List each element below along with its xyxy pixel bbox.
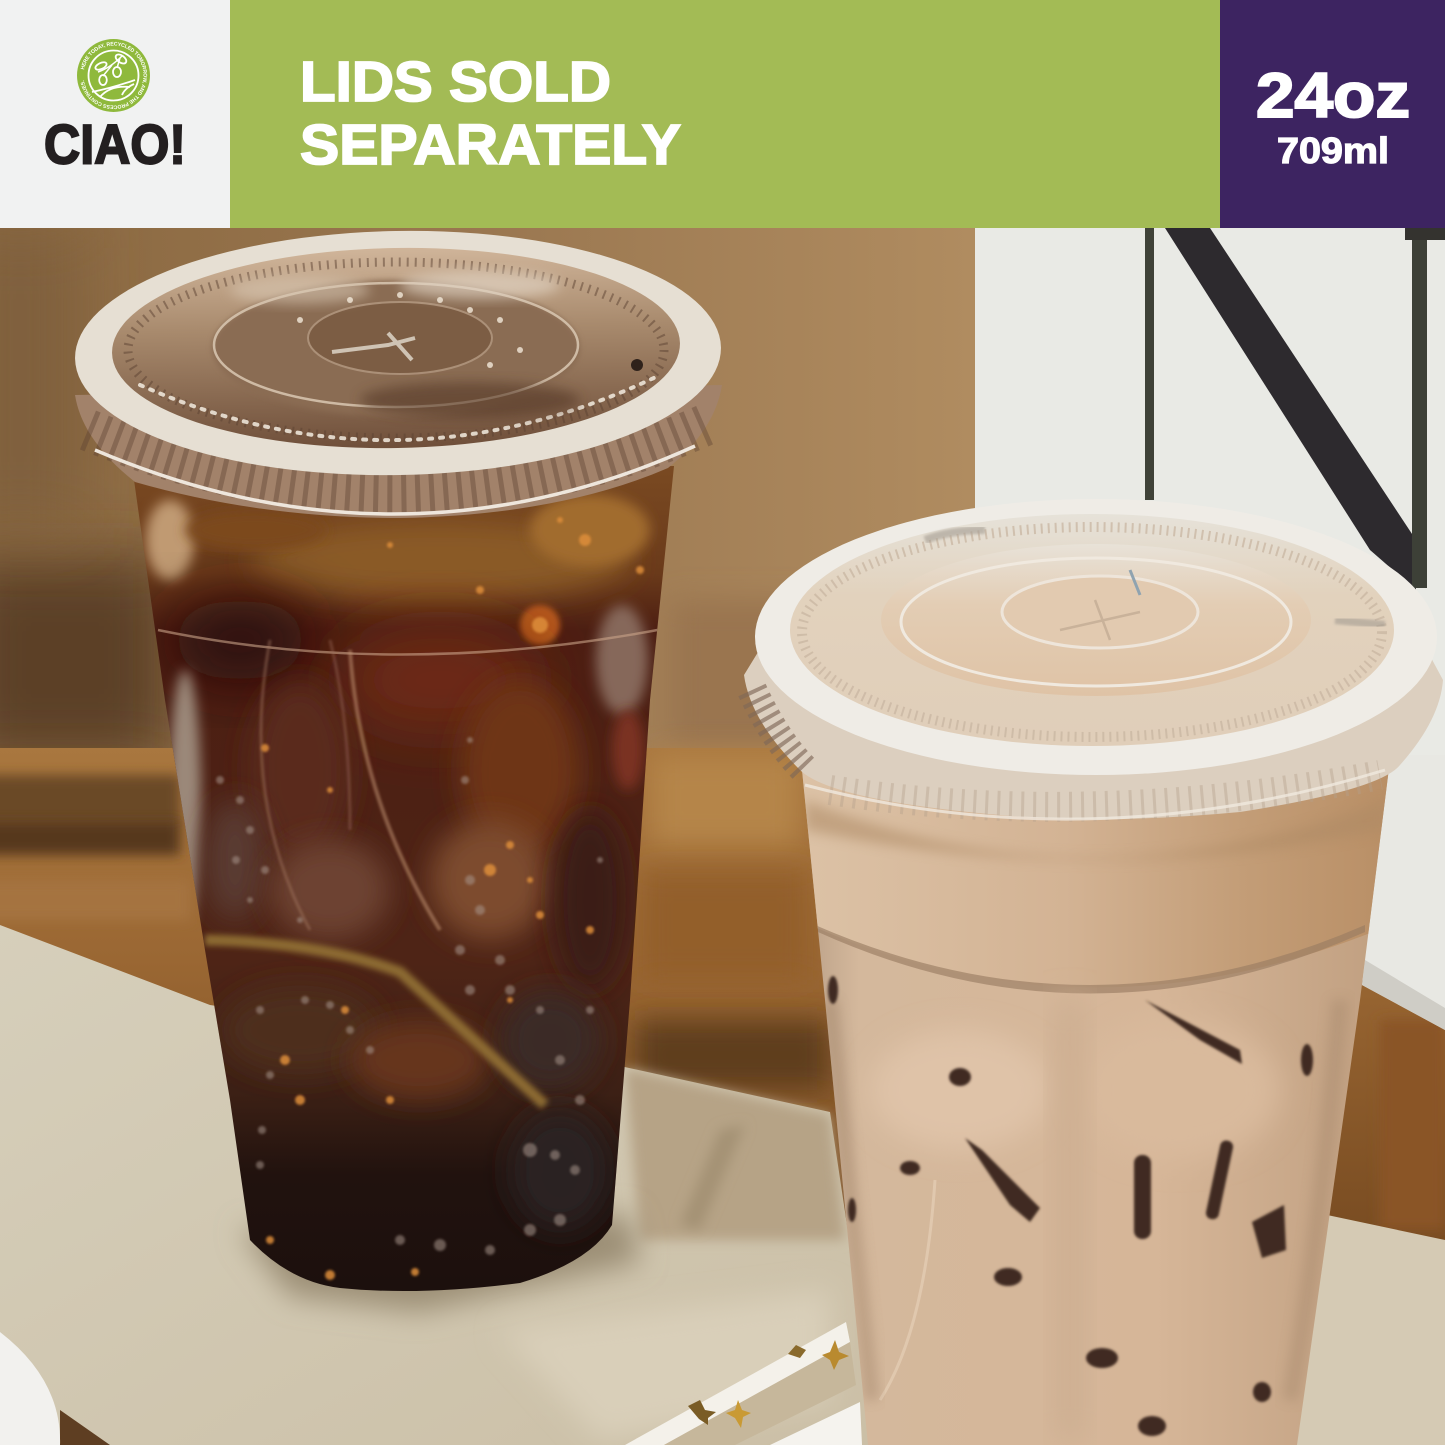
heading: lids sold separately: SEPARATELY: [300, 113, 681, 177]
tapioca pearls: [828, 976, 1313, 1436]
lid dome: [881, 544, 1311, 696]
lid inner well: [790, 514, 1394, 746]
milk tea cup lid: [744, 499, 1443, 819]
wood table: [0, 748, 1445, 1278]
striped straw with gold stars: [625, 1322, 862, 1445]
background wall: [0, 228, 975, 760]
lid dome: [212, 280, 580, 416]
spoon at the lower left: [0, 1332, 60, 1445]
logo badge: HERE TODAY, RECYCLED TOMORROW, AND THE PROCESS CONTINUES.: [80, 42, 148, 110]
milk tea cup: [800, 750, 1390, 1445]
header panel: lids notice: [230, 0, 1220, 228]
header panel: logo: [0, 0, 230, 228]
white box with black letter: [975, 228, 1445, 1030]
cola cup: [134, 466, 674, 1291]
header panel: size: [1220, 0, 1445, 228]
cola cup lid: [73, 225, 723, 518]
lid inner well: [110, 243, 682, 453]
napkin cloth: [0, 925, 1445, 1445]
logo wordmark: CIAO!: [44, 112, 186, 176]
heading: lids sold separately: [300, 50, 681, 177]
lid rim: [73, 225, 723, 481]
lid skirt: [75, 385, 722, 518]
size in millilitres: 709ml: [1277, 130, 1389, 171]
heading: lids sold separately: LIDS SOLD: [300, 50, 611, 114]
lid rim: [755, 499, 1437, 775]
size in ounces: 24oz: [1256, 61, 1410, 131]
lid skirt: [744, 653, 1443, 819]
